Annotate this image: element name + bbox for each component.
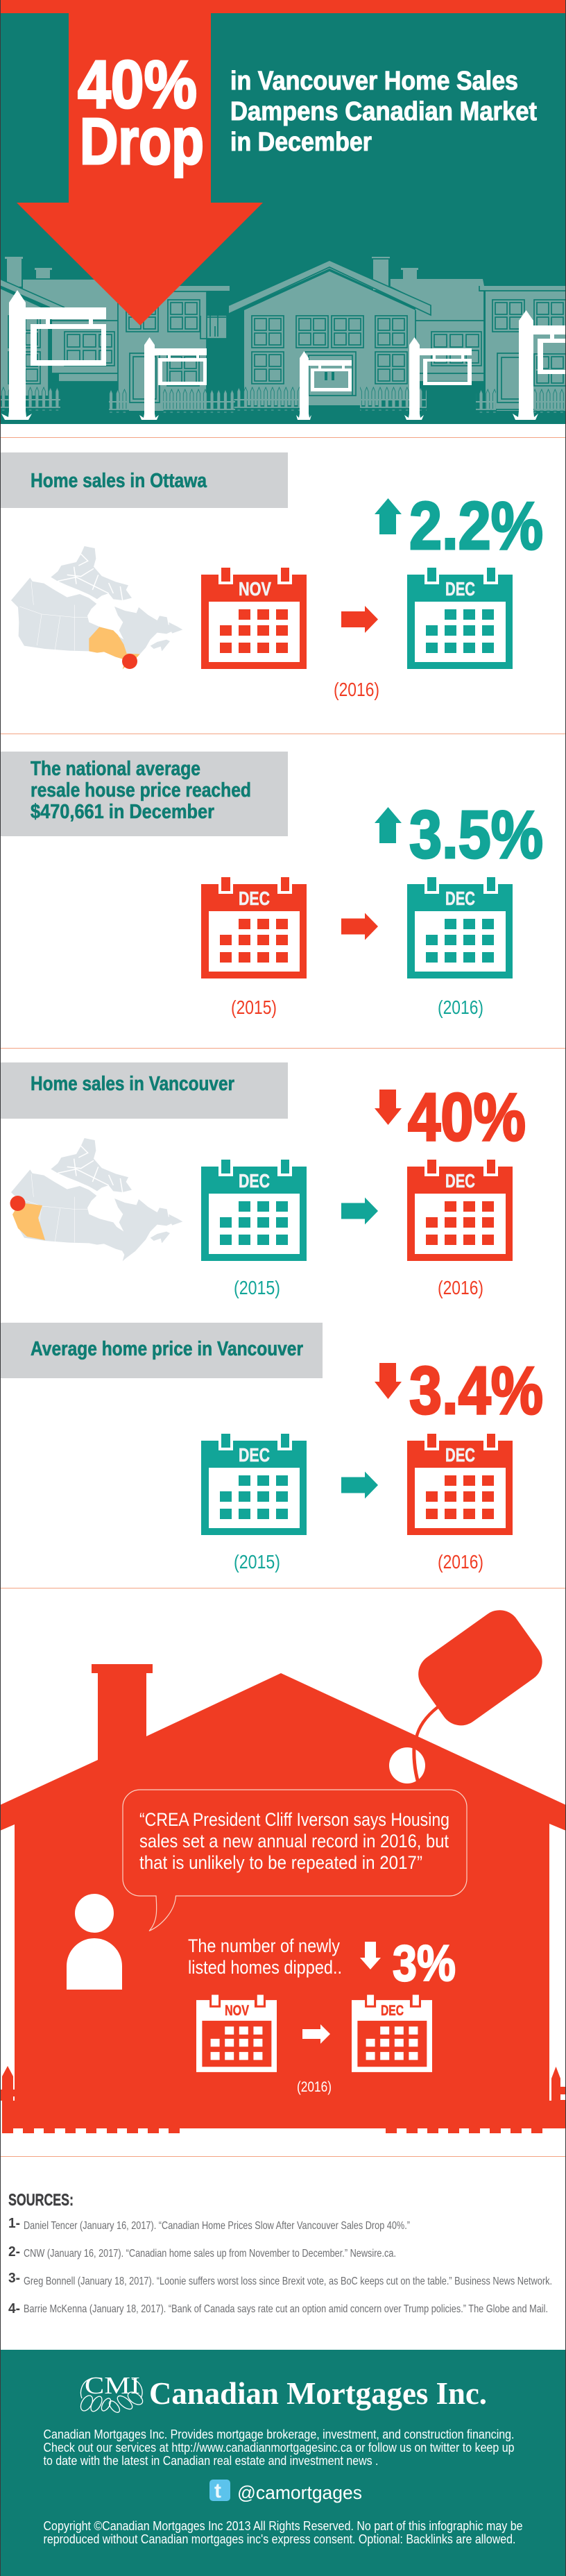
headline: subtitle: in December bbox=[230, 128, 372, 157]
calendar: December 2016 bbox=[407, 1160, 513, 1261]
listed homes statement: The number of newly bbox=[188, 1935, 340, 1956]
change: down 3%: 3% bbox=[393, 1935, 456, 1992]
change: up 2.2%: 2.2% bbox=[409, 488, 543, 564]
heading bbox=[0, 452, 288, 508]
calendar: December 2015: DEC bbox=[239, 1170, 270, 1192]
big red down arrow bbox=[17, 12, 263, 325]
headline: subtitle bbox=[230, 67, 537, 157]
panel: home sales in Vancouver bbox=[0, 1062, 526, 1298]
year labels: (2015) bbox=[234, 1277, 280, 1298]
arrow bbox=[302, 2024, 330, 2044]
divider bbox=[0, 1048, 566, 1049]
source citations bbox=[24, 2220, 552, 2315]
source numbers: 3- bbox=[8, 2271, 20, 2286]
listed homes statement: listed homes dipped.. bbox=[188, 1957, 342, 1978]
change: down 3.4%: 3.4% bbox=[409, 1353, 543, 1428]
company description bbox=[43, 2427, 515, 2468]
quote text: that is unlikely to be repeated in 2017” bbox=[139, 1852, 422, 1873]
calendar: December: DEC bbox=[381, 2003, 404, 2019]
headline: 40% Drop bbox=[78, 46, 204, 178]
change: down 40%: 40% bbox=[408, 1079, 526, 1155]
calendar: December 2015 bbox=[201, 1160, 307, 1261]
header panel bbox=[0, 0, 566, 424]
quote text: “CREA President Cliff Iverson says Housing bbox=[139, 1809, 449, 1830]
arrow bbox=[341, 1471, 378, 1499]
calendar: December 2015: DEC bbox=[239, 1444, 270, 1466]
map of Canada highlighting Ontario bbox=[11, 546, 182, 669]
panel: home sales in Ottawa bbox=[0, 452, 543, 700]
calendar: December bbox=[407, 568, 513, 669]
heading: Home sales in Vancouver bbox=[31, 1073, 234, 1095]
year labels: (2016) bbox=[438, 1551, 483, 1573]
copyright notice bbox=[43, 2519, 523, 2546]
headline: 40% Drop: Drop bbox=[80, 105, 204, 178]
calendar: December 2016: DEC bbox=[445, 1170, 475, 1192]
headline: 40% Drop: 40% bbox=[78, 46, 197, 122]
calendar: November: NOV bbox=[225, 2003, 249, 2019]
headline: subtitle: Dampens Canadian Market bbox=[230, 97, 537, 126]
house silhouette bbox=[0, 1664, 566, 2133]
calendar: November bbox=[196, 1994, 277, 2072]
headline: subtitle: in Vancouver Home Sales bbox=[230, 67, 518, 96]
arrow bbox=[341, 606, 378, 633]
calendar: December: DEC bbox=[445, 578, 475, 600]
copyright notice: reproduced without Canadian mortgages inc's express consent. Optional: Backlinks are allowed. bbox=[43, 2532, 516, 2546]
logo: CMI hands bbox=[78, 2372, 145, 2414]
logo: CMI hands: CMI bbox=[85, 2372, 140, 2399]
illustration: row of houses bbox=[0, 257, 566, 411]
change: down 3% bbox=[360, 1935, 456, 1992]
calendar: December 2015: DEC bbox=[239, 888, 270, 909]
heading: Average home price in Vancouver bbox=[31, 1338, 303, 1360]
heading: $470,661 in December bbox=[31, 801, 214, 823]
heading: resale house price reached bbox=[31, 779, 251, 802]
calendar: November: NOV bbox=[239, 578, 271, 600]
divider bbox=[0, 437, 566, 438]
year label: (2016) bbox=[334, 679, 379, 700]
calendar: November bbox=[201, 568, 307, 669]
year labels bbox=[231, 997, 483, 1018]
top red bar bbox=[0, 0, 566, 13]
price tag bbox=[389, 1602, 550, 1783]
source numbers: 4- bbox=[8, 2301, 20, 2316]
for-sale signs bbox=[1, 290, 566, 420]
year labels bbox=[234, 1551, 483, 1573]
heading bbox=[0, 1062, 288, 1119]
year labels: (2015) bbox=[234, 1551, 280, 1573]
picket fences bbox=[0, 385, 566, 414]
sources heading: SOURCES: bbox=[8, 2191, 74, 2210]
quote text bbox=[139, 1809, 449, 1873]
calendar: December 2016: DEC bbox=[445, 888, 475, 909]
house windows bbox=[8, 300, 566, 386]
year labels: (2016) bbox=[438, 1277, 483, 1298]
footer panel bbox=[0, 2350, 566, 2576]
panel: red house with quote bbox=[0, 1602, 566, 2133]
company description: to date with the latest in Canadian real estate and investment news . bbox=[43, 2454, 379, 2468]
calendar: December 2015 bbox=[201, 877, 307, 978]
calendar: December bbox=[352, 1994, 432, 2072]
heading: Home sales in Ottawa bbox=[31, 470, 207, 492]
company description: Canadian Mortgages Inc. Provides mortgage brokerage, investment, and construction financing. bbox=[43, 2427, 515, 2441]
calendar: December 2016: DEC bbox=[445, 1444, 475, 1466]
company name: Canadian Mortgages Inc. bbox=[149, 2375, 487, 2411]
heading bbox=[0, 752, 288, 836]
quote text: sales set a new annual record in 2016, but bbox=[139, 1831, 449, 1852]
source citations: CNW (January 16, 2017). “Canadian home sales up from November to December.” Newsire.ca. bbox=[24, 2248, 396, 2260]
listed homes statement bbox=[188, 1935, 342, 1978]
calendar: December 2016 bbox=[407, 1434, 513, 1535]
company description: Check out our services at http://www.canadianmortgagesinc.ca or follow us on twitter to keep up bbox=[43, 2441, 515, 2455]
icon: twitter bbox=[209, 2480, 230, 2502]
speech bubble bbox=[123, 1790, 467, 1931]
heading: The national average bbox=[31, 758, 200, 780]
arrow bbox=[341, 913, 378, 940]
icon: person bbox=[67, 1894, 122, 1990]
calendar: December 2016 bbox=[407, 877, 513, 978]
year label: (2016) bbox=[297, 2079, 332, 2095]
panel: national average resale price bbox=[0, 752, 543, 1018]
sources block bbox=[8, 2191, 552, 2316]
panel: average home price in Vancouver bbox=[0, 1323, 543, 1573]
icon: twitter: t bbox=[214, 2480, 221, 2502]
source numbers bbox=[8, 2216, 20, 2316]
source numbers: 2- bbox=[8, 2244, 20, 2260]
divider bbox=[0, 2156, 566, 2157]
map of Canada highlighting British Columbia bbox=[10, 1138, 182, 1261]
year labels: (2015) bbox=[231, 997, 277, 1018]
year labels: (2016) bbox=[438, 997, 483, 1018]
source numbers: 1- bbox=[8, 2216, 20, 2231]
change: up 3.5%: 3.5% bbox=[409, 797, 543, 872]
year labels bbox=[234, 1277, 483, 1298]
calendar: December 2015 bbox=[201, 1434, 307, 1535]
arrow bbox=[341, 1198, 378, 1224]
twitter handle: @camortgages bbox=[237, 2482, 362, 2503]
heading bbox=[0, 1323, 323, 1378]
source citations: Daniel Tencer (January 16, 2017). “Canadian Home Prices Slow After Vancouver Sales Drop 40%.” bbox=[24, 2220, 410, 2232]
